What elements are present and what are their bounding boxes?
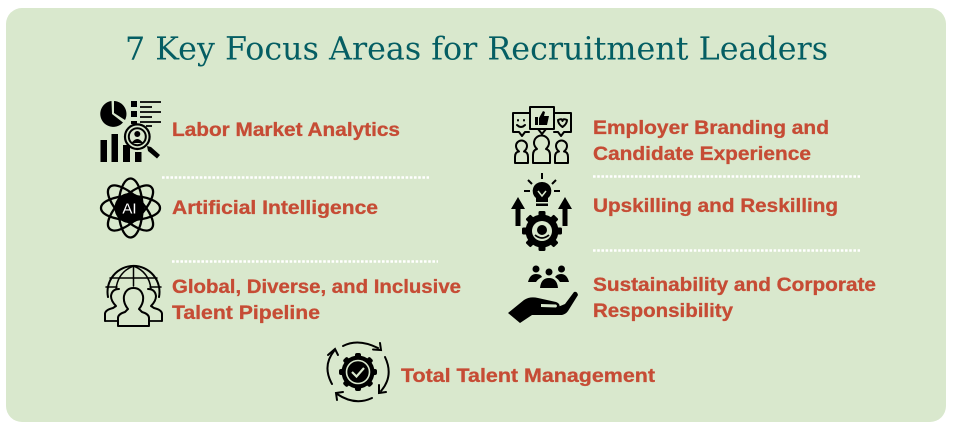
icon: globe and people [105, 266, 162, 326]
label: Employer Branding and [593, 118, 829, 139]
item: Total Talent Management [327, 342, 656, 401]
label: Labor Market Analytics [172, 120, 400, 141]
divider: right upper [593, 175, 860, 178]
item: Upskilling and Reskilling [511, 173, 838, 251]
divider: left upper [162, 176, 429, 179]
label: Total Talent Management [401, 366, 656, 387]
label: Candidate Experience [593, 144, 811, 165]
label: Upskilling and Reskilling [593, 196, 838, 217]
icon: speech bubbles and people [513, 107, 571, 163]
label [593, 275, 876, 322]
label [593, 118, 829, 165]
icon: AI atom: AI [122, 200, 137, 218]
label: Responsibility [593, 301, 733, 322]
divider: right lower [593, 249, 860, 252]
label: Artificial Intelligence [172, 198, 378, 219]
item: Global, Diverse, and Inclusive Talent Pipeline [105, 266, 461, 326]
label [172, 277, 461, 324]
icon: gear with check and cycle arrows [327, 342, 389, 401]
item: Artificial Intelligence [101, 178, 378, 238]
item: Employer Branding and Candidate Experience [513, 107, 829, 165]
label: Talent Pipeline [172, 303, 320, 324]
divider: left lower [172, 260, 438, 263]
item: Labor Market Analytics [100, 101, 400, 162]
icon: AI atom [101, 178, 160, 238]
icon: analytics [100, 101, 161, 162]
icon: lightbulb, arrows and gear [511, 173, 572, 251]
label: Global, Diverse, and Inclusive [172, 277, 461, 298]
label: Sustainability and Corporate [593, 275, 876, 296]
icon: hand holding people [508, 266, 578, 323]
title: 7 Key Focus Areas for Recruitment Leaders [125, 30, 828, 68]
item: Sustainability and Corporate Responsibility [508, 266, 876, 323]
